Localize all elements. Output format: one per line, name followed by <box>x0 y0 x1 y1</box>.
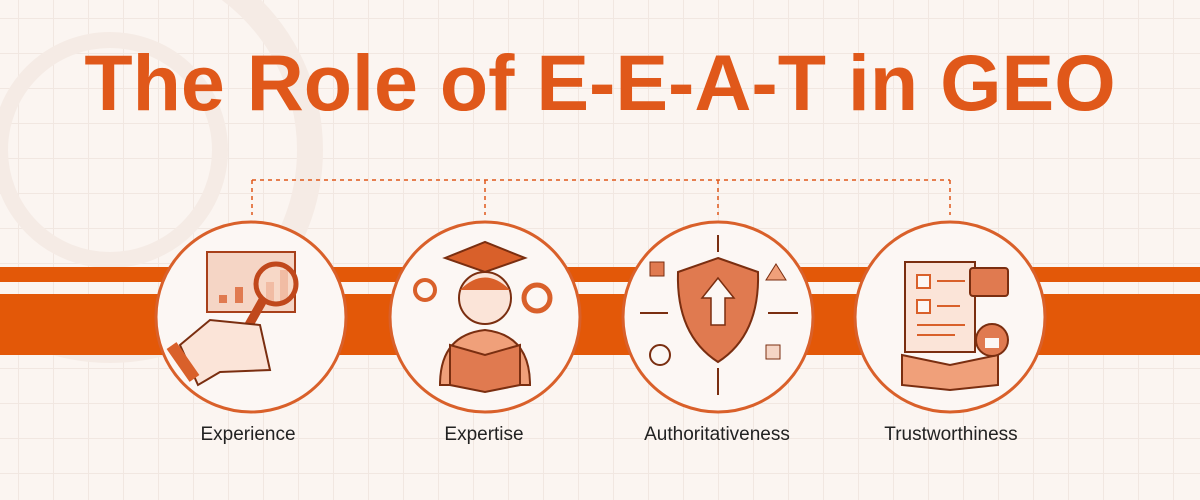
stripes <box>0 267 1200 282</box>
icon: trustworthiness <box>855 222 1045 412</box>
label: Experience: Experience <box>200 424 296 445</box>
label: Trustworthiness: Trustworthiness <box>884 424 1018 445</box>
label: Expertise: Expertise <box>444 424 524 445</box>
title: The Role of E-E-A-T in GEO <box>84 38 1116 127</box>
icon: experience <box>156 222 346 412</box>
label: Authoritativeness: Authoritativeness <box>644 424 790 445</box>
icon: expertise <box>390 222 580 412</box>
icon: authoritativeness <box>623 222 813 412</box>
